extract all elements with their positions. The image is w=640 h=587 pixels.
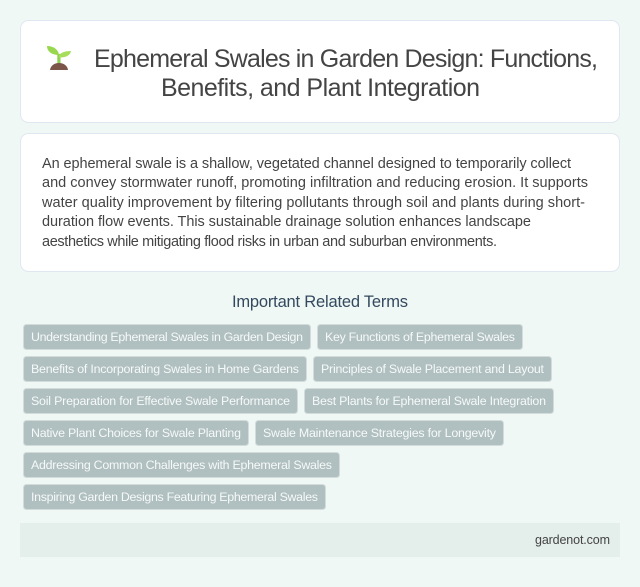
chip: Soil Preparation for Effective Swale Performance xyxy=(31,394,290,408)
chip xyxy=(24,388,298,414)
chip xyxy=(24,356,306,382)
chip: Understanding Ephemeral Swales in Garden Design xyxy=(31,330,303,344)
chip: Native Plant Choices for Swale Planting xyxy=(31,426,241,440)
title xyxy=(94,45,598,102)
heading: related terms: Important Related Terms xyxy=(232,293,408,311)
chip: Benefits of Incorporating Swales in Home Gardens xyxy=(31,362,299,376)
footer: gardenot.com xyxy=(535,533,610,547)
chip xyxy=(256,420,504,446)
text block: description: aesthetics while mitigating flood risks in urban and suburban environments. xyxy=(42,234,497,250)
chip list xyxy=(24,324,554,510)
panel: description xyxy=(20,134,620,272)
chip: Addressing Common Challenges with Ephemeral Swales xyxy=(31,458,332,472)
chip: Principles of Swale Placement and Layout xyxy=(321,362,545,376)
chip xyxy=(24,420,248,446)
panel: title card xyxy=(20,20,620,122)
title: Ephemeral Swales in Garden Design: Functions, xyxy=(94,45,598,73)
text block: description xyxy=(41,156,588,250)
icon: seedling xyxy=(47,46,71,70)
chip xyxy=(314,356,552,382)
title: Benefits, and Plant Integration xyxy=(161,74,480,102)
chip: Key Functions of Ephemeral Swales xyxy=(325,330,515,344)
chip xyxy=(24,324,310,350)
footer xyxy=(20,523,620,557)
chip xyxy=(304,388,554,414)
chip: Inspiring Garden Designs Featuring Ephemeral Swales xyxy=(31,490,318,504)
text block: description: and convey stormwater runoff, promoting infiltration and reducing erosion. It supports xyxy=(42,175,588,191)
chip: Swale Maintenance Strategies for Longevity xyxy=(263,426,497,440)
text block: description: duration flow events. This sustainable drainage solution enhances landscape xyxy=(42,214,531,230)
text block: description: An ephemeral swale is a shallow, vegetated channel designed to temporarily collect xyxy=(42,156,571,172)
text block: description: water quality improvement by filtering pollutants through soil and plants during short- xyxy=(41,195,585,211)
chip xyxy=(24,452,340,478)
chip xyxy=(24,484,326,510)
chip: Best Plants for Ephemeral Swale Integration xyxy=(312,394,546,408)
chip xyxy=(318,324,522,350)
